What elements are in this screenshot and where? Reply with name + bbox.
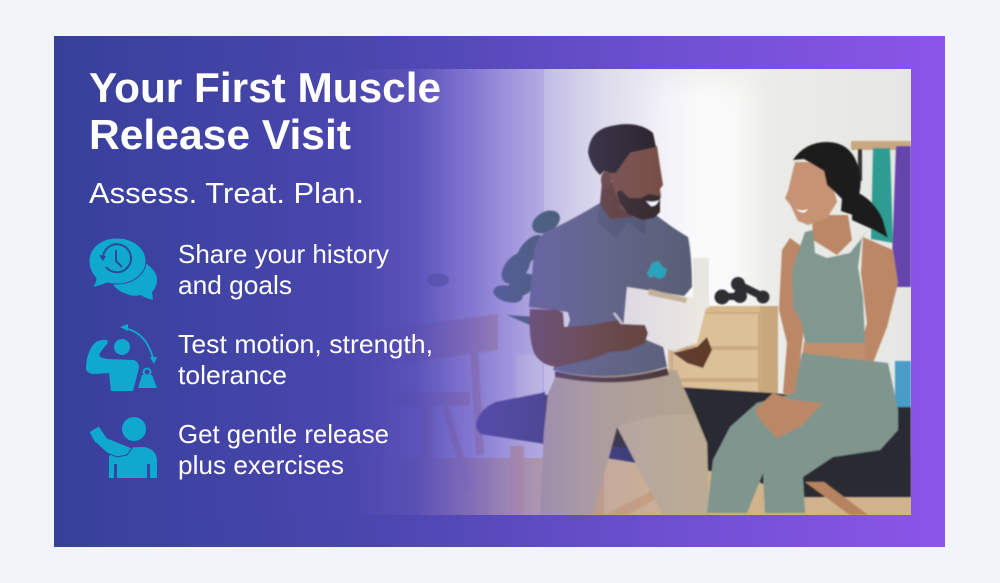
arm: [528, 308, 630, 368]
hands on knee: [755, 393, 823, 438]
card background: [54, 36, 945, 547]
face: [785, 162, 837, 225]
dumbbells: [714, 277, 770, 304]
plant: [491, 206, 564, 400]
neck: [600, 182, 632, 219]
text: [178, 239, 389, 300]
icon: flexing figure with arrow and weight: [86, 324, 157, 391]
neck: [812, 215, 852, 255]
wall corner panel: [484, 69, 544, 458]
text: [178, 329, 433, 390]
clipboard: [623, 287, 708, 351]
ponytail: [852, 190, 888, 238]
shirt: [529, 203, 692, 376]
text: and goals: [178, 270, 292, 300]
arm near: [778, 238, 804, 396]
back hand: [673, 337, 712, 368]
title: Your First Muscle: [89, 64, 441, 111]
icon: hand on shoulder: [89, 417, 157, 478]
step 3: [89, 417, 389, 480]
arm far: [860, 236, 899, 362]
floor: [408, 458, 911, 515]
dresser: [668, 258, 778, 396]
wall: [544, 69, 911, 458]
wall rail with bands: [851, 141, 911, 287]
text: [178, 419, 389, 480]
beard: [617, 190, 660, 220]
photo: therapist and client: [405, 69, 911, 515]
blue foam roller: [895, 361, 911, 408]
text: Test motion, strength,: [178, 329, 433, 359]
icon: speech bubbles with history clock: [89, 238, 157, 300]
front hand: [620, 323, 649, 349]
subtitle: Assess. Treat. Plan.: [89, 178, 364, 210]
text: tolerance: [178, 360, 287, 390]
therapist: [529, 124, 712, 515]
title: [89, 64, 441, 158]
window light: [648, 81, 750, 306]
infographic: [54, 36, 945, 547]
midriff: [802, 342, 866, 360]
side desk and stool: [375, 273, 498, 500]
step 1: [89, 238, 389, 300]
text: Get gentle release: [178, 419, 389, 449]
face: [604, 146, 663, 219]
pants: [540, 370, 709, 515]
photo fade overlay: [54, 69, 700, 515]
client: [707, 142, 898, 513]
text: plus exercises: [178, 450, 344, 480]
belt: [555, 368, 669, 383]
step 2: [86, 324, 433, 391]
ear: [601, 171, 611, 189]
pen: [612, 312, 624, 326]
text: Share your history: [178, 239, 389, 269]
logo: [647, 261, 667, 279]
hair: [793, 142, 861, 215]
leggings: [707, 353, 898, 513]
crop top: [792, 230, 868, 343]
hair: [588, 124, 656, 175]
massage table: [476, 387, 911, 515]
title: Release Visit: [89, 111, 351, 158]
